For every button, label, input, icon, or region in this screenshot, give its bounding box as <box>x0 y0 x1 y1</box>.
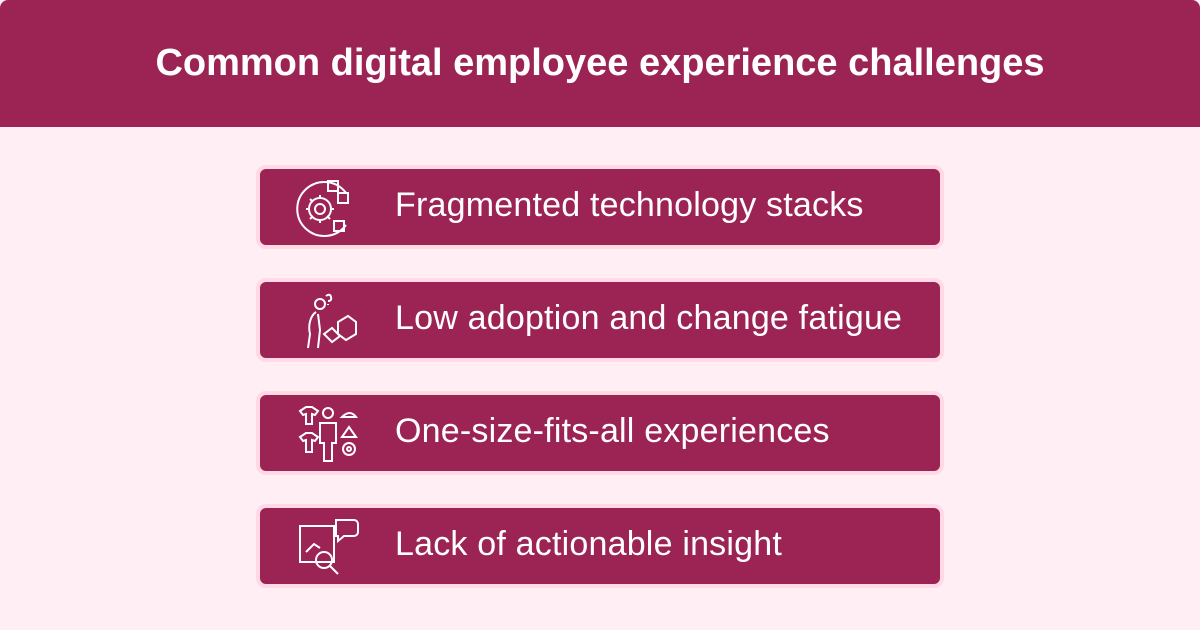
panel: fragmented technology stacks <box>256 165 944 249</box>
panel: lack of actionable insight <box>256 504 944 588</box>
icon: person with shirts and shapes <box>298 406 358 462</box>
panel: one-size-fits-all: One-size-fits-all experiences <box>395 412 830 450</box>
panel: low adoption <box>256 278 944 362</box>
panel: one-size-fits-all <box>256 391 944 475</box>
panel: low adoption: Low adoption and change fatigue <box>395 299 902 337</box>
title <box>0 0 1200 127</box>
title: Common digital employee experience challenges <box>155 42 1045 84</box>
panel: lack of actionable insight: Lack of actionable insight <box>395 525 782 563</box>
icon: chart with magnifier and speech bubble <box>299 519 359 575</box>
icon: gear with puzzle pieces <box>296 180 349 237</box>
icon: tired person with boxes <box>307 294 357 348</box>
panel: fragmented technology stacks: Fragmented technology stacks <box>395 186 864 224</box>
